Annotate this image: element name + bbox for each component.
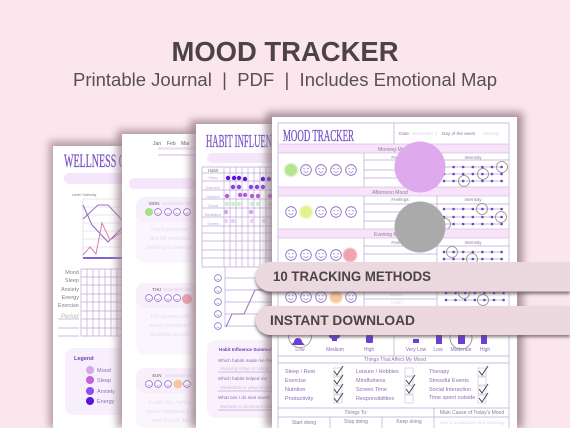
habit table: Screen (207, 222, 219, 226)
tracking grid: Mood (65, 270, 79, 276)
sunday card: November 9th (165, 373, 194, 378)
things that affect my mood: Time spent outside (429, 395, 475, 401)
things that affect my mood: Exercise (285, 378, 306, 384)
sunday card: SUN (152, 373, 162, 378)
date fields (399, 131, 500, 136)
date fields: November 3 (412, 131, 437, 136)
afternoon section: Feelings (391, 197, 409, 202)
tracking grid: Energy (62, 295, 79, 301)
activity and water icons: Moderate (450, 347, 472, 353)
evening section (278, 229, 509, 272)
habit summary card: Which habits made me feel (218, 358, 273, 363)
afternoon section: Intensity (464, 197, 482, 202)
things to and main cause: Things To: (345, 410, 367, 416)
habit summary card: Meditation or deep breaths (220, 385, 275, 390)
things that affect my mood: Screen Time (356, 387, 387, 393)
things to and main cause: Had a productive and inspiring (440, 420, 505, 426)
sunday card (136, 368, 206, 428)
habit table: Sleep (208, 176, 218, 180)
morning section: Morning Mood (378, 147, 410, 153)
night section (286, 288, 506, 306)
month selector: Mar (181, 141, 190, 147)
things that affect my mood: Mindfulness (356, 378, 386, 384)
circle placeholder: lilac (394, 142, 446, 192)
things that affect my mood: Nutrition (285, 387, 305, 393)
line chart (72, 193, 125, 258)
activity and water icons: Very Low (406, 347, 427, 353)
legend: Mood (97, 368, 111, 374)
title: MOOD TRACKER (172, 36, 398, 67)
tracking grid (58, 269, 125, 336)
things to and main cause: Stop doing (344, 419, 368, 425)
thursday card: deadlines at work (151, 332, 190, 338)
month selector: Feb (167, 141, 176, 147)
panel: wellness overview page (49, 141, 135, 428)
thursday card: November 6th (163, 287, 192, 292)
activity and water icons: Medium (326, 347, 344, 353)
night section: Relief (391, 300, 404, 305)
habit table: Nutrition (206, 195, 220, 199)
panel: habit influence page: HABIT INFLUEN (206, 131, 272, 151)
legend: Sleep (97, 378, 111, 384)
monday card: finishing a challenge (147, 245, 193, 251)
legend: Energy (97, 399, 115, 405)
morning section: Intensity (464, 155, 482, 160)
legend: Legend (74, 356, 94, 362)
things that affect my mood (278, 357, 509, 403)
banner: instant download: INSTANT DOWNLOAD (270, 312, 415, 328)
afternoon section (278, 187, 509, 230)
habit table (202, 167, 274, 267)
panel: habit influence page (190, 120, 277, 428)
activity and water icons: Low (433, 347, 443, 353)
sunday card: A calm day, nothing (147, 400, 192, 406)
monday card (136, 197, 206, 263)
thursday card: THU (152, 287, 161, 292)
line chart: Level / Intensity (72, 193, 97, 197)
things that affect my mood: Therapy (429, 369, 449, 375)
habit summary card: Habit Influence Summary (219, 347, 275, 352)
monday card: and felt motivated (150, 236, 190, 242)
habit summary card: Which habits helped me (218, 376, 267, 381)
banner: instant download (256, 306, 570, 337)
habit mood chart (215, 267, 274, 329)
things that affect my mood: Responsibilities (356, 396, 394, 402)
habit table: Social (208, 204, 218, 208)
month selector (153, 141, 198, 155)
monday card: MON (149, 201, 160, 206)
sunday card: went through the (151, 418, 189, 424)
things to and main cause (278, 408, 509, 428)
habit summary card (207, 340, 277, 418)
panel: mood tracker page (266, 112, 523, 428)
date fields: Date: (399, 131, 410, 136)
things that affect my mood: Leisure / Hobbies (356, 369, 399, 375)
panel: weekly journal page (117, 130, 206, 428)
things that affect my mood: Productivity (285, 396, 314, 402)
activity and water icons: High (364, 347, 374, 353)
tracking grid: Exercise (58, 303, 79, 309)
legend: Anxiety (97, 389, 115, 395)
night section: Stress (389, 292, 403, 297)
date fields: Monday (483, 131, 500, 136)
tracking grid: Period (61, 314, 79, 320)
activity and water icons: High (480, 347, 490, 353)
evening section: Evening Mood (374, 232, 406, 238)
thursday card (136, 283, 206, 355)
habit table: Exercise (206, 186, 220, 190)
things that affect my mood: Things That Affect My Mood (364, 357, 426, 363)
sunday card: special happened, just (145, 409, 195, 415)
banner: 10 tracking methods: 10 TRACKING METHODS (273, 268, 431, 284)
things to and main cause: Main Cause of Today's Mood (440, 410, 504, 416)
afternoon section: Afternoon Mood (372, 190, 408, 196)
activity and water icons (278, 324, 509, 356)
activity and water icons: Low (295, 347, 305, 353)
tracking grid: Anxiety (61, 287, 79, 293)
habit summary card: Skipping sleep or sitting (220, 366, 269, 371)
things that affect my mood: Stressful Events (429, 378, 469, 384)
habit table: Meditation (205, 213, 221, 217)
evening section: Intensity (464, 240, 482, 245)
tracking grid: Sleep (65, 278, 79, 284)
monday card: November 3rd (163, 201, 192, 206)
wellness heading: WELLNESS O (64, 151, 126, 172)
thursday card: Felt stressed and (151, 314, 189, 320)
things to and main cause: Start doing (292, 420, 316, 426)
date fields: Day of the week: (442, 131, 476, 136)
banner: 10 tracking methods (255, 262, 570, 294)
morning section (278, 144, 509, 187)
things to and main cause: Keep doing (396, 419, 422, 425)
things that affect my mood: Social Interaction (429, 387, 471, 393)
habit table: Habit (208, 168, 219, 173)
monday card: Had a productive (151, 227, 189, 233)
legend (65, 348, 135, 415)
thursday card: due to unexpected (149, 323, 191, 329)
habit summary card: Maintain a consistent sleep (220, 404, 276, 409)
page heading: MOOD TRACKER (283, 126, 354, 145)
subtitle: Printable Journal | PDF | Includes Emotional Map (73, 70, 497, 90)
evening section: Feelings (391, 240, 409, 245)
things that affect my mood: Sleep / Rest (285, 369, 315, 375)
morning section: Feelings (391, 155, 409, 160)
habit summary card: What can I do next month (218, 395, 271, 400)
month selector: Jan (153, 141, 161, 147)
circle placeholder: grey (394, 202, 446, 252)
